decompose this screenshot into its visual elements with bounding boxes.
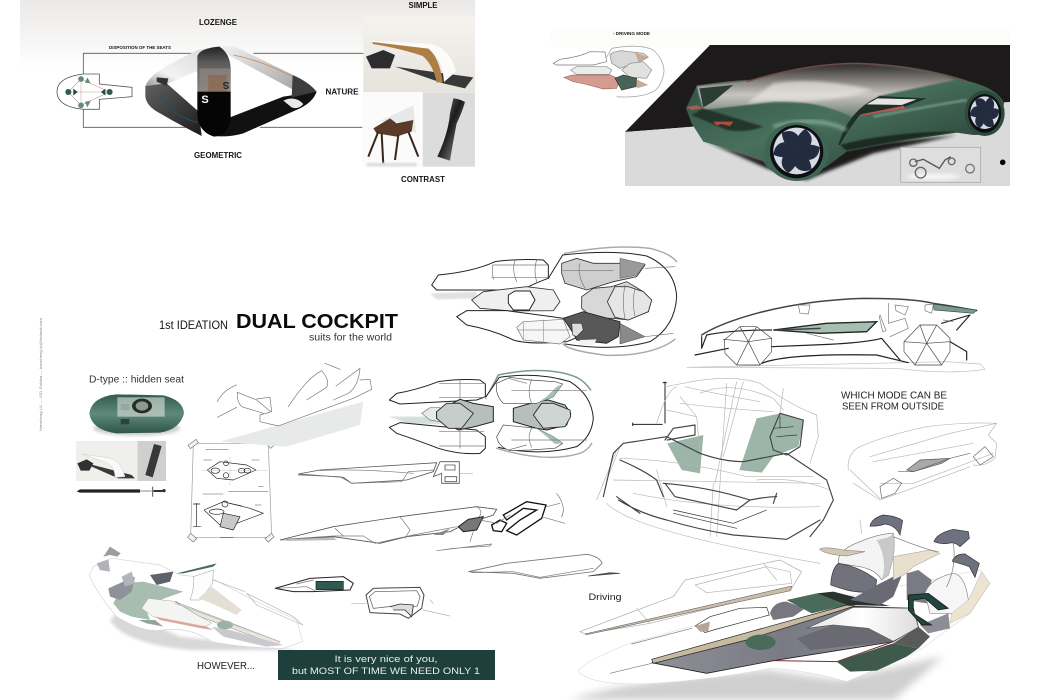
car rendering (686, 63, 1005, 181)
label line two: SEEN FROM OUTSIDE (842, 402, 944, 412)
label: which mode (841, 390, 947, 412)
heading: lozenge: LOZENGE (199, 18, 238, 27)
label: driving mode: - DRIVING MODE (613, 31, 650, 36)
heading: nature: NATURE (326, 88, 359, 96)
sketch: long profile two (280, 493, 565, 551)
panel: paper sketch (188, 439, 274, 542)
sketch: steering frame (352, 587, 450, 618)
sketch: long profile one (298, 462, 473, 483)
rear seats (893, 550, 940, 580)
credit line: Hancheng LU — ISD-Rubika — hancheng.lu@hotmail.com (38, 318, 43, 431)
logo mark: lower: S (201, 94, 209, 106)
image: sword (77, 487, 166, 497)
sketch: lower render three-quarter (89, 547, 303, 650)
panel: driving mode rendering (551, 29, 1010, 186)
inset: wheel mechanism (901, 147, 981, 182)
sketch: plan two (193, 501, 263, 530)
diagram: top view upper (430, 247, 677, 355)
title block (159, 311, 398, 344)
sketch: small profile near driving label (468, 554, 620, 578)
rear wheel (965, 91, 1005, 136)
main title: DUAL COCKPIT (236, 311, 398, 333)
sketch: side view (687, 298, 985, 372)
heading: geometric: GEOMETRIC (194, 151, 242, 160)
label line one: WHICH MODE CAN BE (841, 390, 947, 402)
callout: most of time (278, 650, 495, 680)
callout line one: It is very nice of you, (334, 654, 438, 665)
callout line two: but MOST OF TIME WE NEED ONLY 1 (292, 666, 480, 677)
label: driving: Driving (588, 592, 622, 603)
light floor (625, 102, 1010, 186)
heading: simple: SIMPLE (408, 1, 438, 10)
subtitle: suits for the world (309, 332, 392, 344)
tape corners (188, 439, 274, 542)
panel: lozenge concept (20, 0, 475, 184)
image: chair (362, 92, 422, 167)
white hull (578, 570, 990, 684)
sketch: front perspective with hidden seats (597, 378, 833, 539)
main hull (652, 606, 918, 673)
image: d-type car top view (89, 394, 184, 436)
label: disposition of the seats: DISPOSITION OF THE SEATS (109, 45, 171, 50)
diagram: lozenge form (145, 46, 317, 137)
sketch: driving mode render (570, 503, 990, 700)
image: bench reference (76, 441, 166, 481)
diagram: seat layout (57, 74, 132, 109)
sketch: seat perspective (217, 363, 372, 447)
rear panel (580, 560, 802, 634)
green deck (787, 593, 853, 613)
label: however: HOWEVER... (197, 661, 255, 672)
sketch: rear perspective (848, 423, 997, 500)
marker dot (1000, 160, 1006, 165)
sketch: cockpit pod (275, 577, 353, 592)
title prefix: 1st IDEATION (159, 320, 228, 332)
front seat (838, 533, 894, 580)
panel: d-type reference (76, 374, 184, 497)
connector lines (83, 53, 363, 127)
logo mark: upper: S (222, 79, 229, 90)
diagram: top view lower (388, 371, 593, 457)
front wheel (764, 122, 829, 181)
handwritten notes (193, 449, 268, 538)
diagram: mini seat plan (553, 46, 664, 97)
ground shadow (570, 657, 943, 700)
image: bench (363, 17, 475, 92)
heading: d-type: D-type :: hidden seat (89, 374, 184, 386)
heading: contrast: CONTRAST (401, 175, 445, 184)
sketch: plan one (202, 457, 267, 485)
dark backdrop (625, 45, 1010, 132)
image: sculpture (423, 92, 475, 167)
